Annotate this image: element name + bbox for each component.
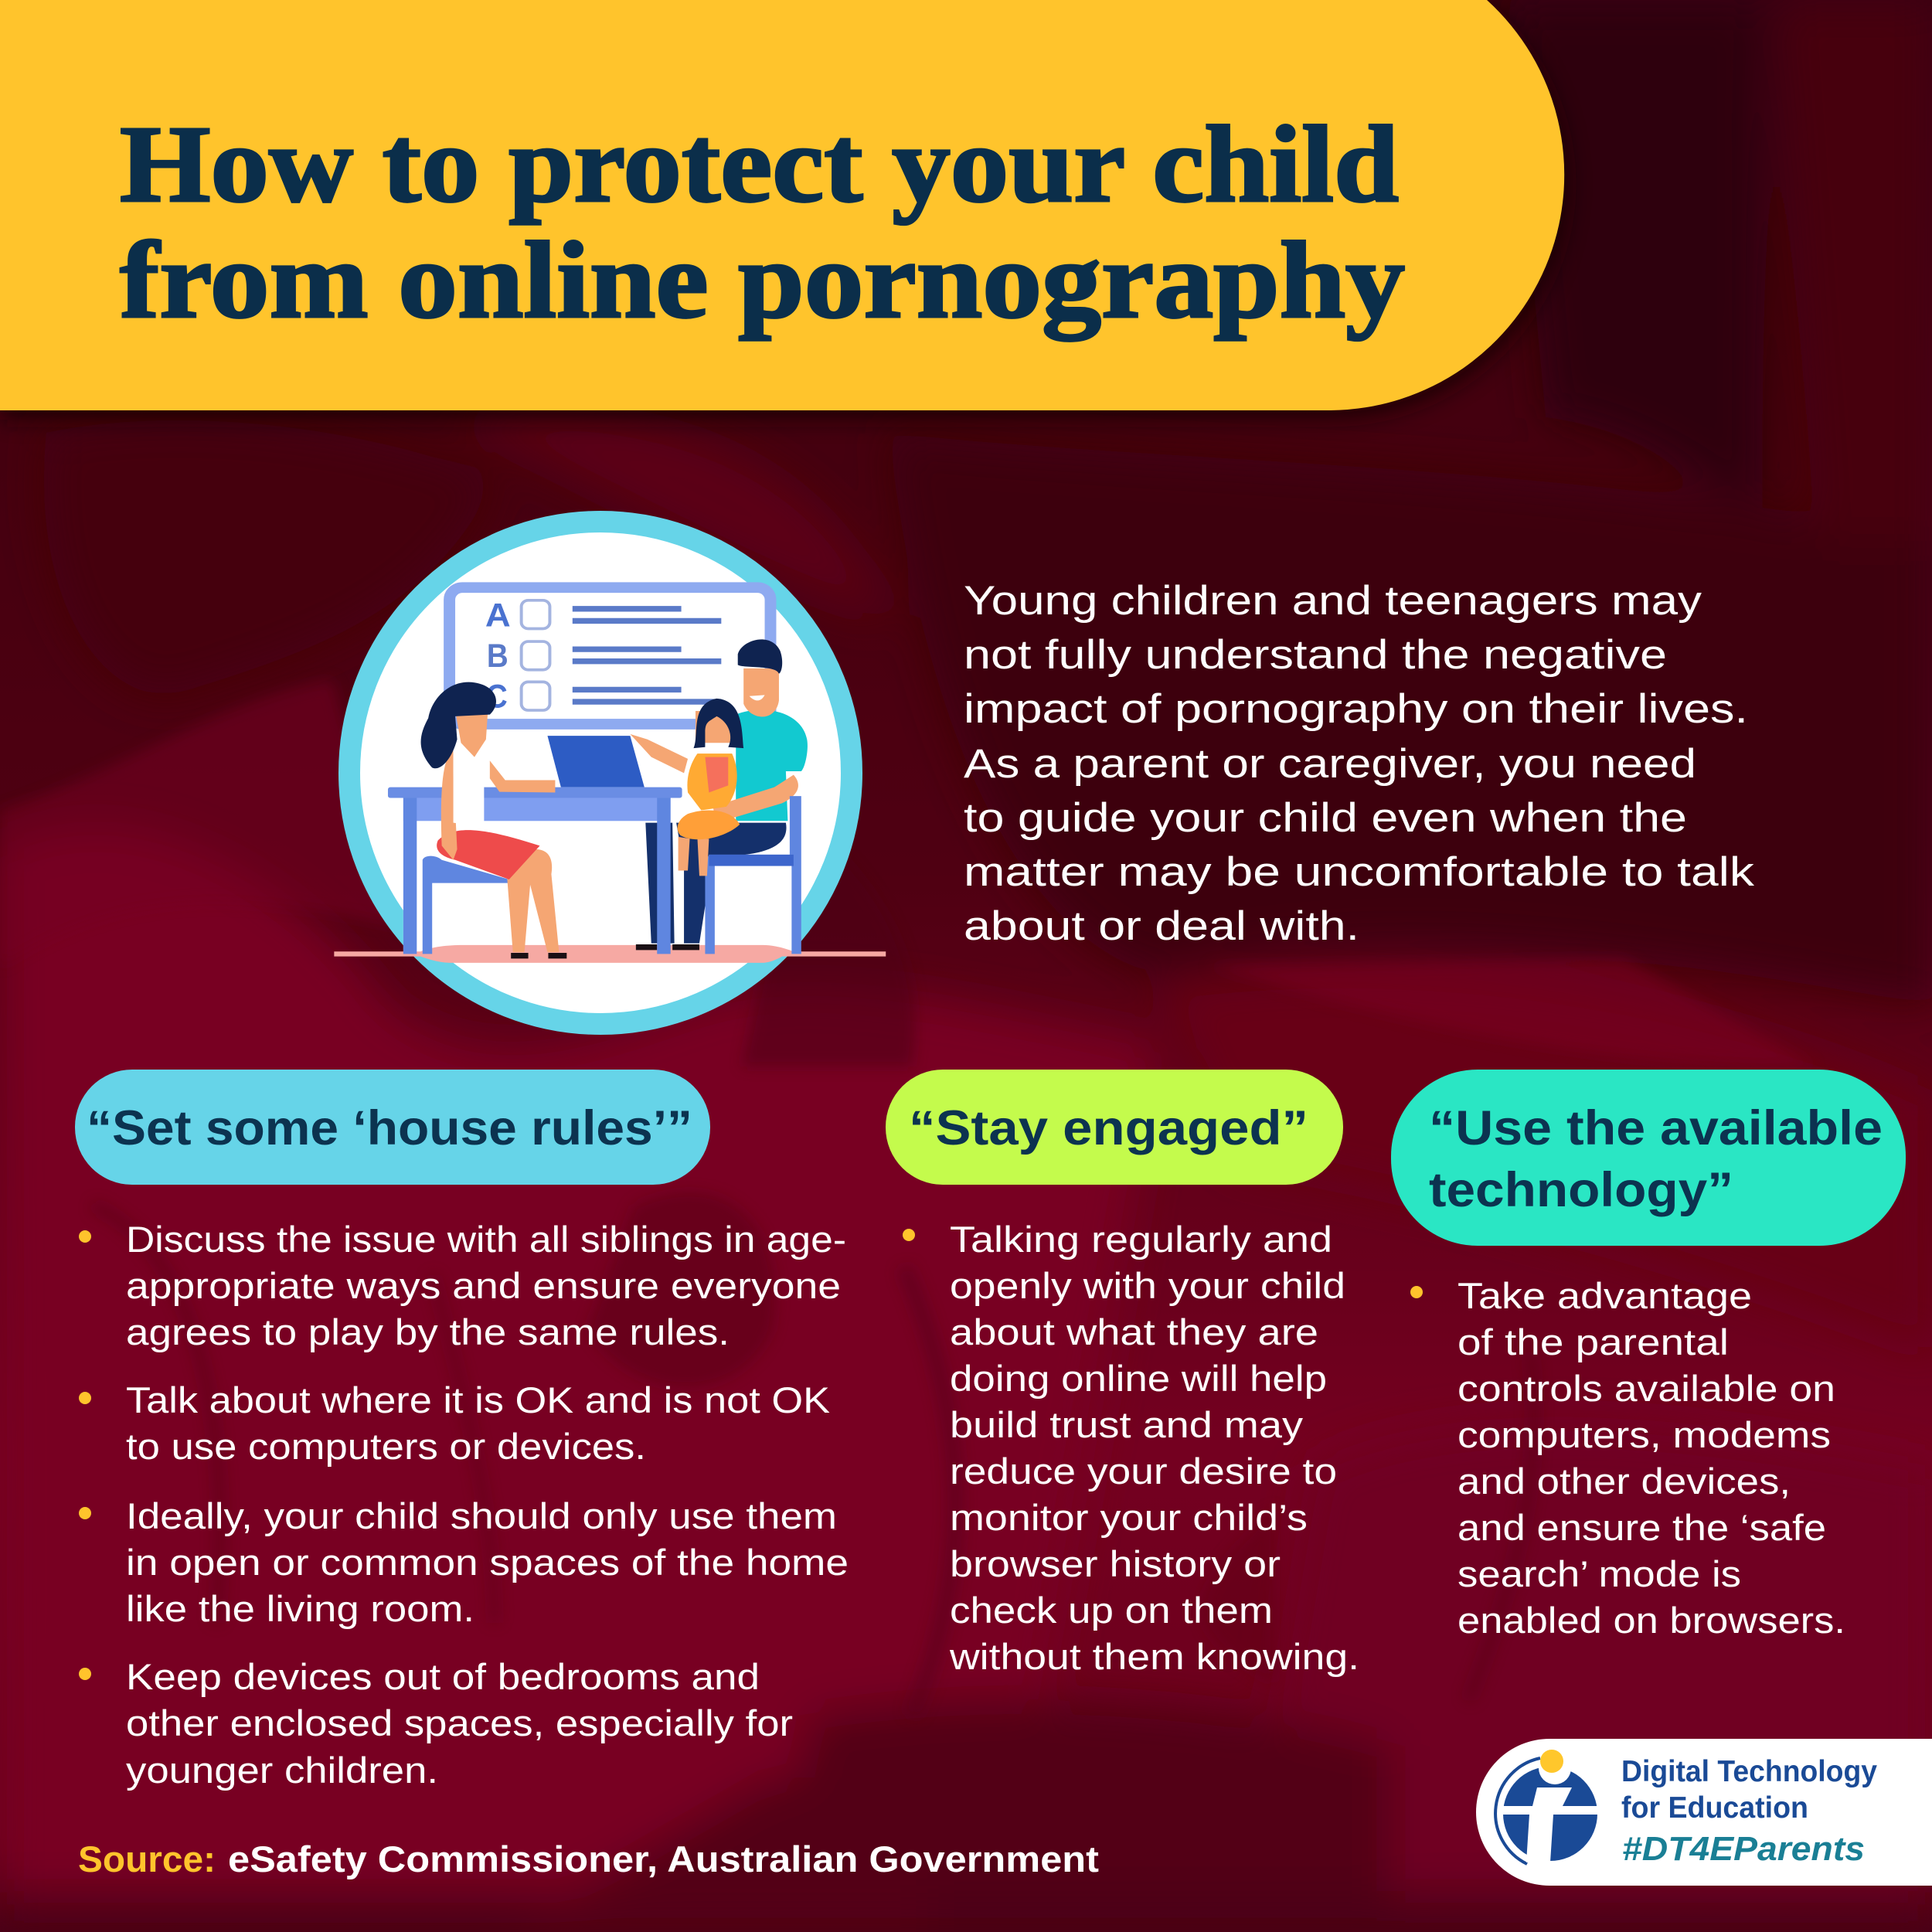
title: from online pornography — [120, 219, 1405, 341]
header banner — [0, 0, 1569, 420]
bullet text: without them knowing. — [949, 1636, 1359, 1677]
bullet list: appropriate ways and ensure everyone — [126, 1265, 841, 1306]
bullet text — [903, 1219, 1359, 1677]
bullet text: search’ mode is — [1458, 1553, 1741, 1594]
illustration: family at desk in circle — [334, 522, 886, 1024]
man: legs, torso, head — [636, 639, 808, 950]
chairs — [423, 796, 801, 954]
intro paragraph: about or deal with. — [964, 903, 1359, 949]
table — [388, 787, 682, 954]
white backdrop — [403, 885, 799, 952]
bullet text: monitor your child’s — [950, 1497, 1308, 1538]
question board: A — [485, 597, 511, 634]
question board — [450, 587, 770, 724]
panel: stay engaged — [886, 1070, 1359, 1677]
bullet text: build trust and may — [950, 1404, 1304, 1445]
heading pill: “Set some ‘house rules’” — [87, 1101, 692, 1155]
logo badge: for Education — [1621, 1791, 1808, 1825]
intro paragraph: not fully understand the negative — [964, 632, 1667, 678]
heading pill: “Stay engaged” — [909, 1101, 1308, 1155]
bullet list: Discuss the issue with all siblings in age- — [126, 1219, 846, 1260]
bullet list: younger children. — [126, 1750, 438, 1791]
bullet list: other enclosed spaces, especially for — [126, 1702, 793, 1743]
title — [120, 103, 1405, 341]
panel: use the available technology — [1391, 1070, 1906, 1641]
question board: C — [486, 679, 508, 715]
bullet text: reduce your desire to — [950, 1451, 1337, 1492]
question board: B — [487, 638, 509, 675]
bullet text: openly with your child — [950, 1265, 1345, 1306]
bullet text: computers, modems — [1458, 1414, 1831, 1455]
intro paragraph: matter may be uncomfortable to talk — [964, 849, 1755, 895]
bullet text — [1410, 1275, 1845, 1641]
bullet text: and ensure the ‘safe — [1458, 1507, 1826, 1548]
source line: Source: — [78, 1838, 216, 1879]
bullet list: Talk about where it is OK and is not OK — [126, 1379, 830, 1420]
woman — [421, 682, 566, 958]
intro paragraph: Young children and teenagers may — [964, 578, 1702, 624]
intro paragraph: impact of pornography on their lives. — [964, 686, 1748, 732]
bullet list — [79, 1219, 849, 1791]
bullet text: about what they are — [950, 1311, 1318, 1352]
bullet list: to use computers or devices. — [126, 1426, 646, 1467]
ground — [334, 945, 886, 963]
heading pill: technology” — [1429, 1163, 1733, 1217]
logo badge: Digital Technology — [1621, 1755, 1877, 1788]
intro paragraph — [964, 578, 1755, 949]
heading pill — [1391, 1070, 1906, 1246]
bullet text: check up on them — [950, 1590, 1273, 1631]
bullet text: enabled on browsers. — [1458, 1600, 1845, 1641]
title: How to protect your child — [120, 103, 1399, 225]
source line: eSafety Commissioner, Australian Government — [228, 1838, 1099, 1879]
logo badge: #DT4EParents — [1622, 1830, 1865, 1868]
bullet text: browser history or — [950, 1543, 1281, 1584]
heading pill — [75, 1070, 710, 1185]
bullet list: in open or common spaces of the home — [126, 1542, 849, 1583]
bullet text: and other devices, — [1458, 1461, 1791, 1502]
panel: set some house rules — [75, 1070, 849, 1791]
intro paragraph: to guide your child even when the — [964, 795, 1687, 841]
bullet list: Ideally, your child should only use them — [126, 1495, 837, 1536]
intro paragraph: As a parent or caregiver, you need — [964, 741, 1696, 787]
logo badge — [1476, 1739, 1932, 1886]
bullet list: like the living room. — [126, 1588, 474, 1629]
girl — [630, 699, 743, 876]
bullet list: Keep devices out of bedrooms and — [126, 1656, 760, 1697]
bullet text: Talking regularly and — [950, 1219, 1332, 1260]
laptop — [547, 736, 645, 787]
bullet text: controls available on — [1458, 1368, 1835, 1409]
icon: DT4E logo — [1495, 1750, 1598, 1864]
bullet text: Take advantage — [1458, 1275, 1752, 1316]
heading pill — [886, 1070, 1343, 1185]
bullet text: of the parental — [1458, 1321, 1729, 1362]
bullet list: agrees to play by the same rules. — [126, 1311, 730, 1352]
heading pill: “Use the available — [1429, 1101, 1883, 1155]
bullet text: doing online will help — [950, 1358, 1327, 1399]
